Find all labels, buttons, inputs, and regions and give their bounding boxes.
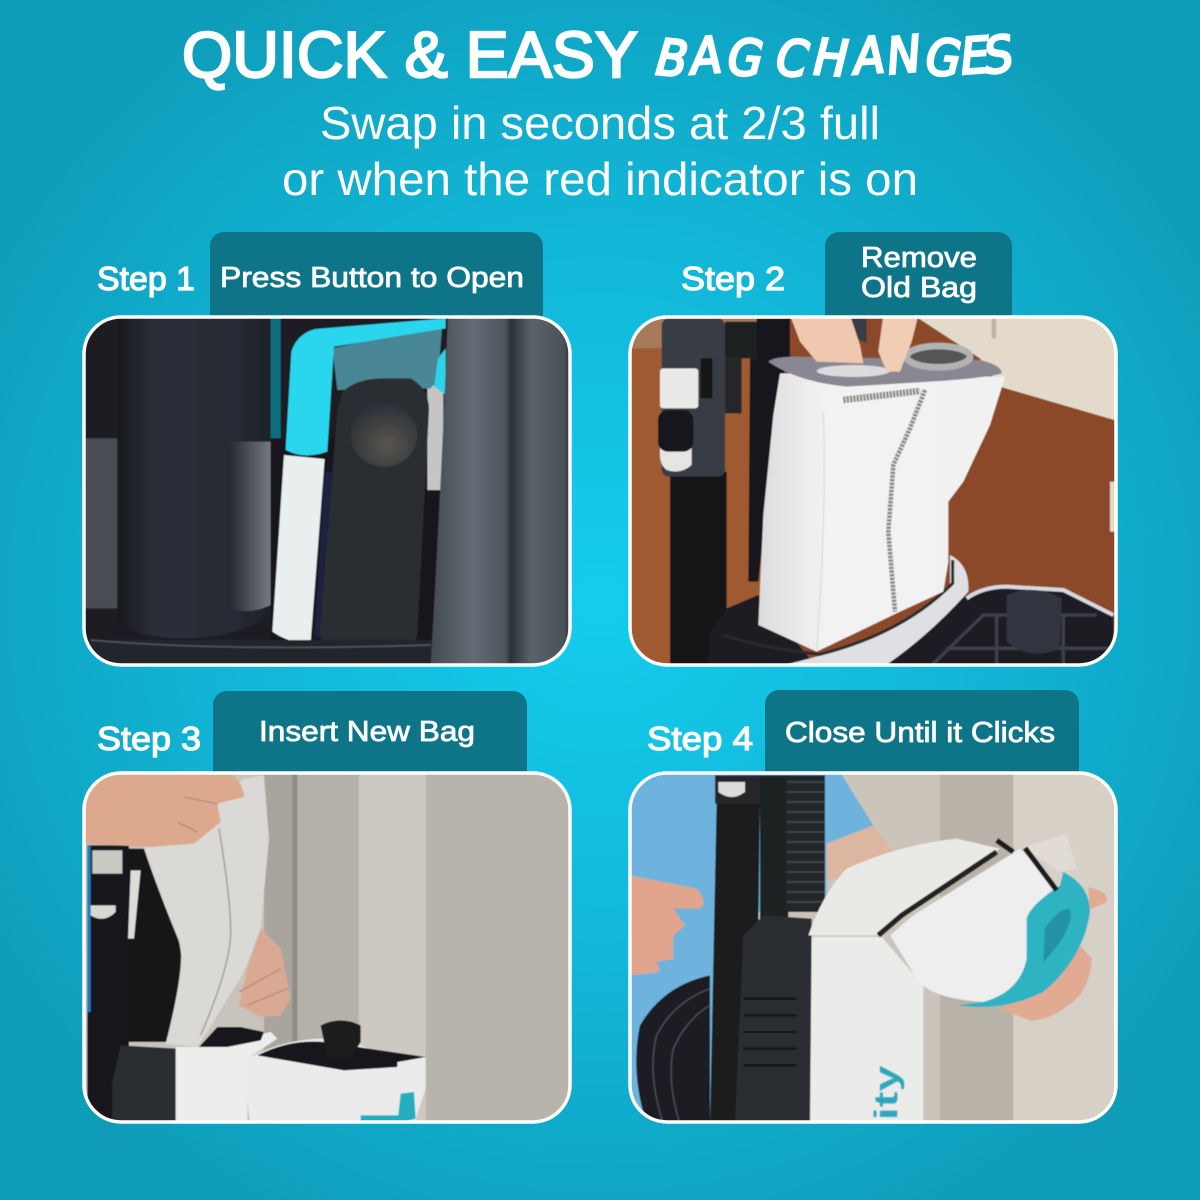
title: QUICK & EASY [182, 18, 638, 91]
panel: step 2 photo [630, 315, 1120, 668]
step 4 tab [765, 690, 1079, 774]
subtitle: or when the red indicator is on [282, 153, 918, 205]
panel: step 4 photo [630, 772, 1120, 1124]
title: BAGCHANGES [654, 24, 1017, 89]
step 3 label: Step 3 [97, 720, 201, 757]
panel: step 1 photo [84, 315, 574, 670]
step 2 label: Step 2 [681, 260, 785, 297]
panel: step 4 photo: ity [868, 1065, 905, 1120]
step 2 tab [825, 232, 1012, 316]
step 1 label: Step 1 [97, 260, 195, 297]
step 3 tab [213, 691, 527, 774]
step 2 tab: Old Bag [861, 272, 977, 304]
title [182, 18, 1017, 91]
step 3 tab: Insert New Bag [259, 716, 475, 748]
subtitle: Swap in seconds at 2/3 full [320, 97, 880, 149]
subtitle [282, 97, 918, 205]
step 1 tab [210, 232, 543, 318]
step 1 tab: Press Button to Open [220, 262, 524, 294]
step 2 tab: Remove [861, 242, 977, 274]
panel: step 3 photo [84, 772, 574, 1124]
step 4 label: Step 4 [647, 720, 753, 757]
step 4 tab: Close Until it Clicks [785, 717, 1055, 749]
